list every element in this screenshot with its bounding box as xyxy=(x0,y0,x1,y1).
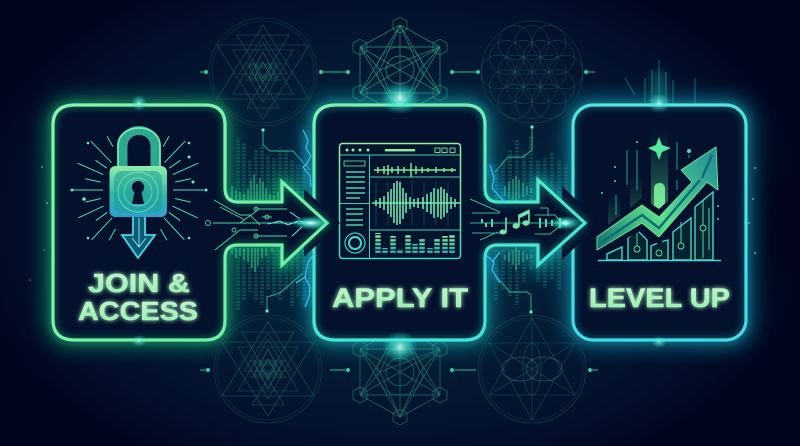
icon: padlock xyxy=(70,128,208,258)
mixer dividers xyxy=(340,155,460,258)
line two: ACCESS xyxy=(78,296,198,326)
arrow detail xyxy=(602,155,712,242)
scattered dots left xyxy=(29,166,48,281)
flare bottom left xyxy=(131,335,147,347)
lightning centre top xyxy=(394,92,406,105)
flare top centre xyxy=(380,82,420,114)
dark notch where arrow one crosses card two xyxy=(304,189,340,257)
window buttons xyxy=(435,148,455,152)
icon: music notes xyxy=(500,210,530,234)
lock body xyxy=(110,166,167,217)
line one: JOIN & xyxy=(88,268,190,298)
arrow two circuitry xyxy=(470,199,570,240)
scattered dots right xyxy=(748,167,756,254)
dark notch where arrow two crosses card three xyxy=(562,186,600,260)
chart shadow xyxy=(594,172,704,256)
track list xyxy=(344,161,365,225)
arrow one circuitry xyxy=(206,200,310,250)
card outline join xyxy=(53,105,327,340)
shackle xyxy=(123,130,155,168)
card fill level up xyxy=(573,105,746,340)
icon: audio mixer xyxy=(340,144,460,258)
circuit trace nodes xyxy=(261,125,534,314)
label: level up: LEVEL UP xyxy=(589,283,730,313)
rays xyxy=(72,136,204,240)
shackle highlight xyxy=(118,128,160,166)
ray dots xyxy=(70,142,208,239)
waveforms above and below arrows xyxy=(232,174,531,272)
lightning glow xyxy=(305,130,503,307)
bar circuit detail xyxy=(634,200,709,258)
lightning in gaps xyxy=(296,130,505,307)
card inner glow level up xyxy=(573,105,746,340)
panel: level up xyxy=(573,105,746,340)
right edge shadow xyxy=(680,0,800,446)
vertical grid xyxy=(376,180,448,226)
lock face rings xyxy=(114,171,162,213)
card fill join xyxy=(53,105,327,340)
card inner glow apply it xyxy=(314,105,585,340)
flare top right xyxy=(647,93,671,113)
card outline level up xyxy=(573,105,746,340)
sacred geometry: top left xyxy=(209,18,317,126)
sacred geometry: top right xyxy=(481,21,583,123)
label: apply it: APPLY IT xyxy=(332,283,469,313)
outer glow: all cards xyxy=(53,105,746,340)
arrow two flare xyxy=(549,216,581,230)
keyhole xyxy=(132,181,144,204)
star xyxy=(648,137,671,160)
arrow one flare xyxy=(291,216,331,230)
thin beams xyxy=(616,142,689,215)
vertical beams above level up xyxy=(625,60,695,105)
card fill apply it xyxy=(314,105,585,340)
bars xyxy=(607,192,713,260)
sacred geometry: bottom right xyxy=(478,315,586,423)
connector nodes xyxy=(200,70,598,372)
window controls xyxy=(346,148,415,152)
sacred geometry: bottom centre xyxy=(353,319,447,425)
flare bottom right xyxy=(651,336,667,348)
main waveform xyxy=(372,181,460,225)
baseline xyxy=(598,260,721,262)
label: join and access xyxy=(78,268,198,326)
flare bottom centre xyxy=(382,331,418,363)
arrow one lightning xyxy=(268,212,310,236)
level bars xyxy=(378,233,452,253)
circuit traces between cards xyxy=(263,127,532,312)
knob xyxy=(345,233,365,253)
sacred geometry: bottom left xyxy=(214,315,322,423)
flare top left xyxy=(131,95,147,111)
rising arrow xyxy=(597,147,718,250)
light beams xyxy=(608,125,668,235)
card inner glow join xyxy=(53,105,327,340)
bright column xyxy=(654,183,665,223)
card outline apply it xyxy=(314,105,585,340)
equalizer backdrop xyxy=(238,136,566,310)
lock arrow inner xyxy=(132,218,146,247)
top waveform xyxy=(374,163,456,177)
panel: apply it xyxy=(314,105,600,340)
lock arrow xyxy=(122,215,155,258)
mixer frame xyxy=(340,144,460,258)
beam glow above level up xyxy=(651,72,667,106)
sacred geometry: top centre xyxy=(353,17,447,123)
sparkle dots xyxy=(601,141,719,220)
icon: growth chart xyxy=(594,125,721,260)
panel: join and access xyxy=(53,105,340,340)
